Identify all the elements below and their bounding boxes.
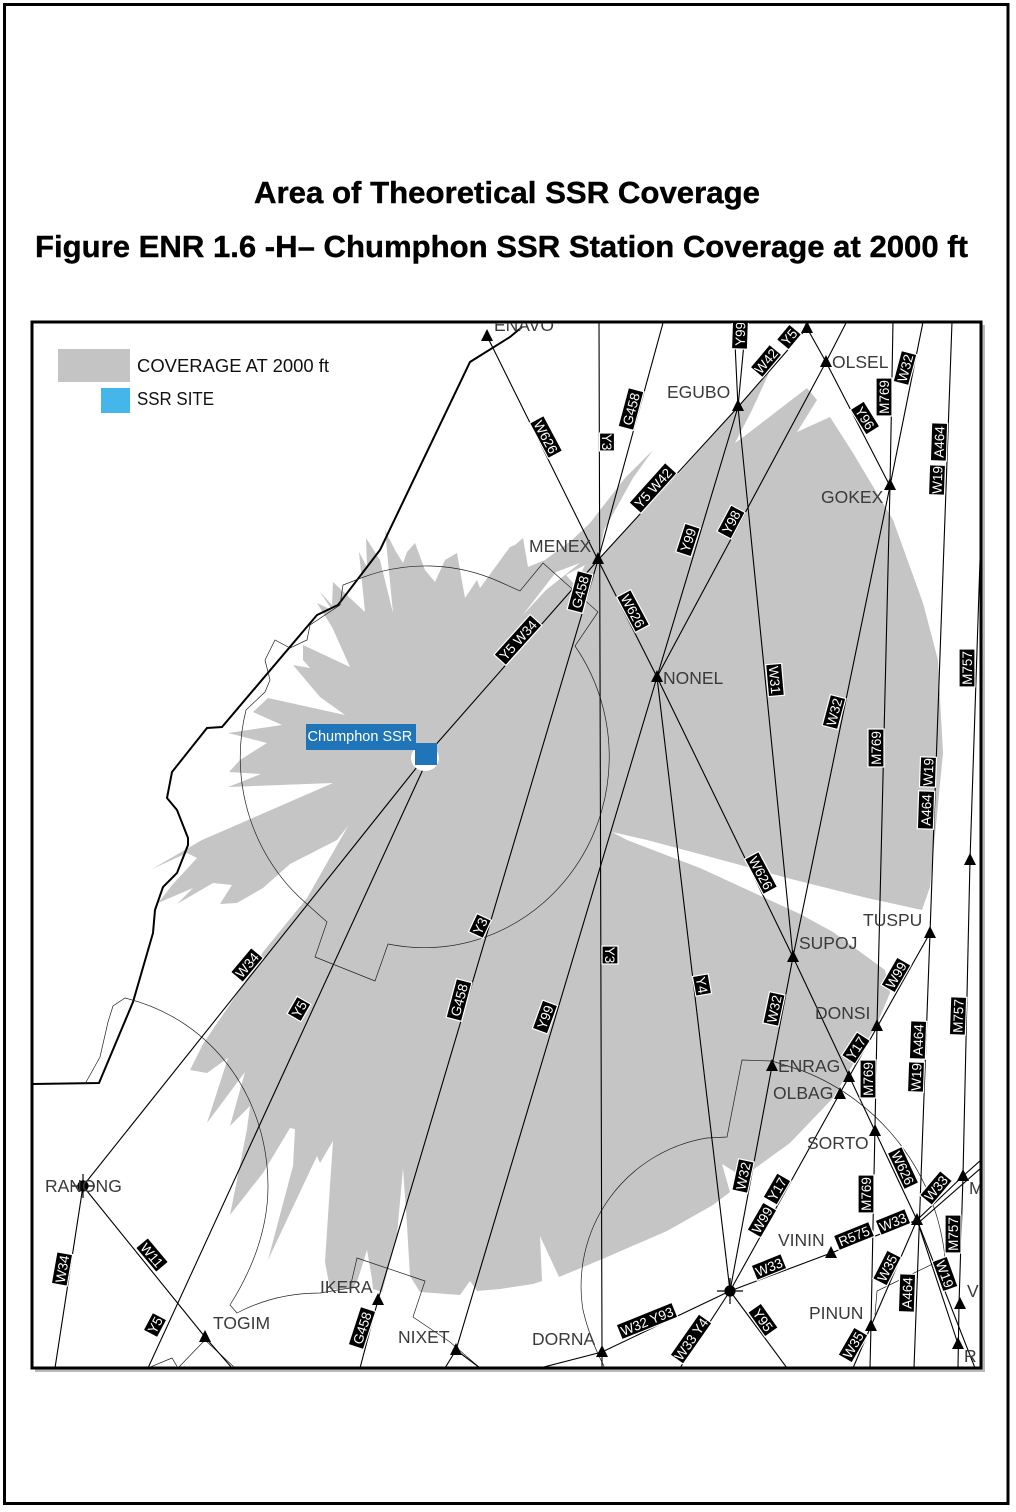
route label W33: W33: [878, 1210, 909, 1235]
coastline: [33, 327, 522, 1084]
route label Y5 lower: Y5: [289, 998, 310, 1020]
route label A464: A464: [931, 426, 948, 458]
route label Y5 W34: Y5 W34: [497, 617, 540, 663]
legend: [58, 349, 329, 413]
route label W34: W34: [233, 949, 262, 981]
SSR site label: [306, 724, 416, 750]
subtitle: Figure ENR 1.6 -H– Chumphon SSR Station Coverage at 2000 ft: [35, 229, 968, 264]
route label W626 mid: W626: [618, 592, 647, 630]
route label W19 mid: W19: [921, 758, 936, 786]
waypoint names: SUPOJ: [799, 933, 857, 953]
route label Y96: Y96: [852, 404, 877, 432]
route label W34 south: W34: [53, 1254, 72, 1284]
route label M769 mid: M769: [869, 731, 884, 765]
route label M757 lower: M757: [950, 999, 967, 1033]
legend swatch coverage: [58, 349, 130, 382]
route label W42: W42: [752, 346, 781, 377]
waypoint names: V: [967, 1281, 979, 1301]
route label W99 south: W99: [749, 1204, 776, 1236]
white gap beneath MENEX: [566, 565, 585, 585]
route label Y5: Y5: [778, 326, 800, 348]
route label Y3 lower left: Y3: [470, 916, 491, 937]
route label Y17 south: Y17: [765, 1175, 790, 1203]
route label Y17: Y17: [844, 1034, 869, 1062]
waypoint names: OLBAG: [773, 1083, 833, 1103]
waypoint names: M: [969, 1178, 984, 1198]
route label W626 south: W626: [888, 1149, 917, 1187]
route label M769 south: M769: [859, 1177, 874, 1211]
route label Y99 top: Y99: [733, 322, 748, 346]
route label W33 Y4: W33 Y4: [672, 1315, 712, 1363]
route label G458 lower: G458: [448, 982, 471, 1018]
waypoint names: IKERA: [320, 1277, 373, 1297]
airspace boundaries: [85, 563, 945, 1368]
route label W626 lower: W626: [746, 854, 775, 892]
title: [35, 175, 968, 264]
route label W99: W99: [883, 959, 910, 991]
route label Y99: Y99: [678, 526, 699, 554]
route label W19 lower: W19: [909, 1063, 924, 1091]
route label G458 south: G458: [350, 1310, 375, 1346]
waypoint names: NIXET: [398, 1327, 450, 1347]
route label G458 upper: G458: [569, 574, 592, 610]
waypoint names: RANONG: [45, 1176, 122, 1196]
route label W33 west: W33: [754, 1255, 785, 1280]
route label A464 south: A464: [899, 1277, 916, 1309]
waypoint names: TOGIM: [213, 1313, 270, 1333]
route label W35 south: W35: [840, 1329, 867, 1361]
route label Y3 central: Y3: [602, 947, 617, 963]
route label W32 south: W32: [733, 1161, 754, 1191]
waypoint names: R: [964, 1346, 977, 1366]
waypoint names: PINUN: [809, 1303, 863, 1323]
route label M769 lower: M769: [861, 1062, 876, 1096]
white gap near MENEX: [522, 563, 580, 616]
waypoint names: [45, 315, 984, 1366]
route label R575: R575: [836, 1223, 872, 1249]
route label Y4: Y4: [693, 976, 710, 995]
route label W32 mid: W32: [824, 697, 845, 727]
air routes: [55, 322, 982, 1368]
waypoint names: GOKEX: [821, 487, 884, 507]
coverage area at 2000 ft: [152, 373, 943, 1295]
waypoint names: EGUBO: [667, 382, 730, 402]
route label W11: W11: [137, 1240, 166, 1270]
route label M769: M769: [877, 380, 892, 414]
legend text site: SSR SITE: [137, 389, 214, 409]
route label W626: W626: [531, 418, 560, 456]
route label A464 lower: A464: [910, 1024, 927, 1056]
route label Y95: Y95: [750, 1306, 776, 1334]
route label Y98: Y98: [719, 508, 744, 536]
route label Y5 south: Y5: [145, 1314, 166, 1336]
route label M757 south: M757: [946, 1217, 961, 1251]
route label G458: G458: [620, 391, 643, 427]
waypoint names: DORNA: [532, 1329, 596, 1349]
route label A464 mid: A464: [918, 794, 935, 826]
route label W31: W31: [766, 666, 783, 695]
waypoint names: OLSEL: [832, 352, 889, 372]
route label W19: W19: [930, 466, 945, 494]
waypoint triangles: [199, 321, 976, 1357]
SSR site marker: [411, 743, 439, 771]
route label Y5 W42: Y5 W42: [632, 465, 675, 511]
waypoint names: SORTO: [807, 1133, 869, 1153]
waypoint names: DONSI: [815, 1003, 870, 1023]
waypoint names: ENAVO: [494, 315, 554, 335]
title: Area of Theoretical SSR Coverage: [254, 175, 760, 210]
SSR site label: Chumphon SSR: [308, 729, 412, 745]
route label W32 Y93: W32 Y93: [619, 1304, 676, 1339]
route label W32: W32: [895, 353, 916, 383]
route label M757: M757: [960, 651, 975, 685]
waypoint names: MENEX: [529, 536, 592, 556]
legend swatch site: [101, 388, 130, 413]
waypoint names: ENRAG: [778, 1056, 840, 1076]
route label W35: W35: [874, 1252, 900, 1284]
map panel shadow: [35, 325, 985, 1372]
route label W19 south: W19: [933, 1259, 956, 1290]
route label W32 lower: W32: [764, 994, 785, 1024]
waypoint names: VININ: [778, 1230, 825, 1250]
route label Y99 lower: Y99: [534, 1003, 557, 1031]
map panel: [32, 315, 984, 1368]
VOR station symbols: [71, 1174, 743, 1304]
legend text coverage: COVERAGE AT 2000 ft: [137, 356, 329, 376]
waypoint names: TUSPU: [863, 910, 922, 930]
route label Y3: Y3: [599, 434, 614, 450]
route labels: [51, 319, 975, 1364]
waypoint names: NONEL: [663, 668, 724, 688]
route label W33 east: W33: [922, 1173, 951, 1204]
